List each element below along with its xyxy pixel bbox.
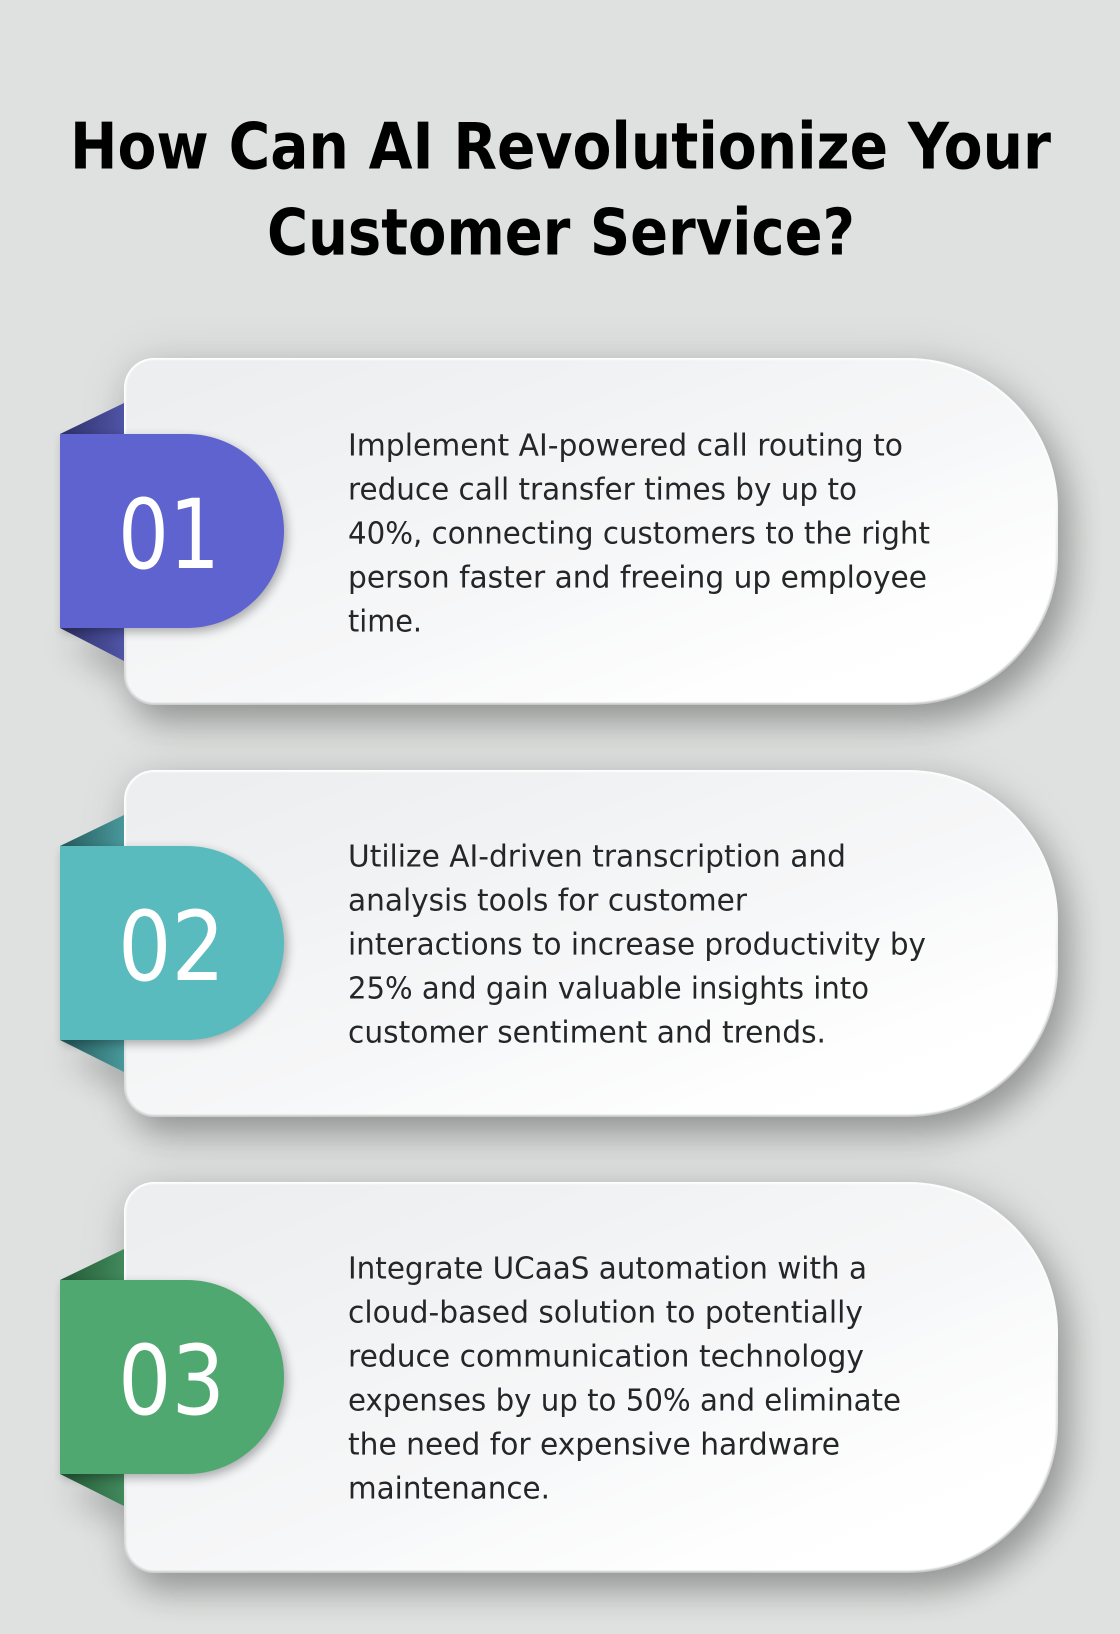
text: step 1: reduce call transfer times by up to — [348, 472, 857, 508]
title: Customer Service? — [267, 196, 855, 270]
number badge: step 2: 02 — [118, 891, 225, 1003]
text: step 1: Implement AI-powered call routing to — [348, 428, 903, 464]
number badge: step 2 — [60, 846, 284, 1040]
text: step 3: expenses by up to 50% and eliminate — [348, 1384, 901, 1418]
number badge: step 3 — [60, 1280, 284, 1474]
text: step 1: person faster and freeing up employee — [348, 560, 927, 596]
text: step 2 — [348, 840, 926, 1050]
panel: step 1 — [60, 358, 1068, 722]
number badge: step 1 — [60, 434, 284, 628]
ribbon fold: step 2 — [60, 815, 124, 1072]
card: step 2 — [124, 770, 1058, 1117]
ribbon fold: step 3 — [60, 1249, 124, 1506]
text: step 3 — [348, 1252, 901, 1506]
text: step 3: Integrate UCaaS automation with a — [348, 1252, 867, 1286]
ribbon fold: step 1 — [60, 403, 124, 661]
number badge: step 1: 01 — [118, 479, 220, 591]
text: step 3: maintenance. — [348, 1472, 550, 1506]
text: step 2: interactions to increase productivity by — [348, 928, 926, 962]
text: step 3: the need for expensive hardware — [348, 1428, 840, 1462]
text: step 1: time. — [348, 604, 422, 640]
text: step 2: 25% and gain valuable insights into — [348, 972, 869, 1006]
text: step 3: cloud-based solution to potentially — [348, 1296, 863, 1330]
text: step 2: Utilize AI-driven transcription and — [348, 840, 846, 874]
text: step 1: 40%, connecting customers to the right — [348, 516, 930, 552]
panel: step 2 — [60, 770, 1068, 1134]
card: step 3 — [124, 1182, 1058, 1573]
text: step 3: reduce communication technology — [348, 1340, 864, 1374]
text: step 1 — [348, 428, 930, 640]
title — [70, 110, 1051, 270]
card: step 1 — [124, 358, 1058, 705]
text: step 2: customer sentiment and trends. — [348, 1016, 826, 1050]
text: step 2: analysis tools for customer — [348, 884, 747, 918]
panel: step 3 — [60, 1182, 1068, 1590]
number badge: step 3: 03 — [118, 1325, 225, 1437]
